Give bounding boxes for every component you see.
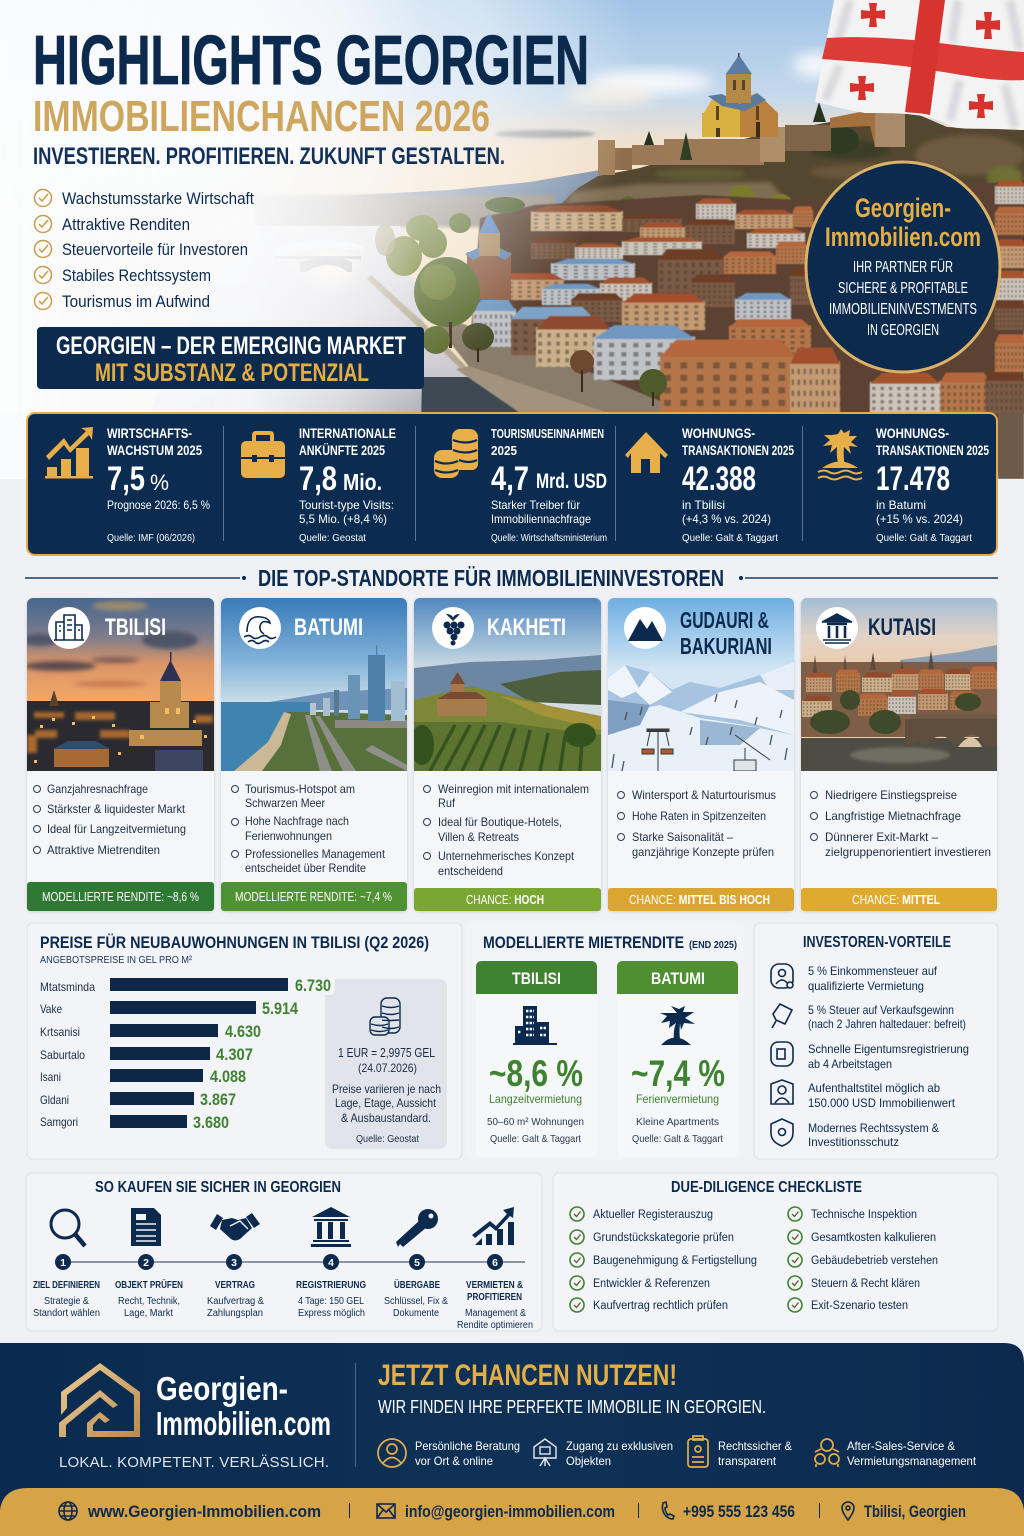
stat: transactions Batumi (818, 425, 989, 544)
service: legally secure: Rechtssicher & (718, 1439, 792, 1453)
panel: key figures (27, 413, 997, 555)
bar chart: Saburtalo (40, 1048, 85, 1062)
step labels: VERTRAG (215, 1280, 255, 1291)
stat: international arrivals: Tourist-type Visits: (299, 498, 394, 512)
note box: exchange rate: Quelle: Geostat (356, 1134, 419, 1145)
panel: investor benefits: INVESTOREN-VORTEILE (803, 934, 951, 951)
timeline: 1 (60, 1257, 66, 1269)
step labels: Kaufvertrag & (207, 1296, 264, 1307)
church (702, 53, 778, 137)
step labels: Strategie & (44, 1296, 89, 1307)
bar chart: 6.730 (295, 976, 331, 995)
panel: due-diligence checklist: Kaufvertrag rechtlich prüfen (593, 1300, 728, 1312)
rating: Tbilisi yield: MODELLIERTE RENDITE: ~8,6 % (42, 890, 199, 904)
section heading: top locations (25, 565, 998, 591)
panel: modelled rental yield: MODELLIERTE MIETRENDITE (483, 933, 684, 952)
stat: economic growth: Prognose 2026: 6,5 % (107, 498, 210, 512)
yield card: Batumi: ~7,4 % (631, 1053, 725, 1094)
bar chart: 4.088 (210, 1067, 246, 1086)
card: Gudauri and Bakuriani: GUDAURI & (680, 607, 769, 633)
rating: Gudauri chance (608, 888, 794, 911)
panel: modelled rental yield (465, 923, 745, 1159)
card: Tbilisi: Ganzjahresnachfrage (47, 782, 148, 796)
bar chart: 4.630 (225, 1022, 261, 1041)
icon: mountains (624, 607, 666, 649)
stat: economic growth: 7,5 (107, 460, 145, 498)
icon: location pin (842, 1502, 854, 1520)
step labels: ÜBERGABE (394, 1278, 440, 1291)
panel: investor benefits: 150.000 USD Immobilienwert (808, 1096, 956, 1110)
hero checklist (34, 190, 254, 311)
icon: wave (239, 607, 281, 649)
hero checklist: Attraktive Renditen (62, 216, 190, 234)
bar chart: Vake (40, 1002, 62, 1016)
stat: international arrivals: Quelle: Geostat (299, 532, 366, 544)
card: Tbilisi: TBILISI (105, 614, 166, 641)
title: HIGHLIGHTS GEORGIEN (33, 21, 589, 99)
card: Kutaisi: KUTAISI (868, 614, 936, 641)
stat: tourism revenue: Immobiliennachfrage (491, 512, 591, 526)
badge: Georgien-Immobilien.com: Georgien- (855, 193, 951, 223)
card: Kakheti: Unternehmerisches Konzept (438, 849, 575, 863)
card: Batumi (221, 598, 407, 911)
stat: transactions Tbilisi: Quelle: Galt & Taggart (682, 532, 778, 544)
stat: transactions Tbilisi: (+4,3 % vs. 2024) (682, 512, 771, 526)
service: after-sales: Vermietungsmanagement (847, 1454, 977, 1468)
yield card: Tbilisi: Langzeitvermietung (489, 1092, 582, 1106)
note box: exchange rate: (24.07.2026) (358, 1061, 417, 1075)
card: Gudauri and Bakuriani: ganzjährige Konzepte prüfen (632, 845, 774, 859)
icon: handshake (210, 1213, 260, 1240)
panel: investor benefits: 5 % Steuer auf Verkaufsgewinn (808, 1003, 954, 1017)
step labels: REGISTRIERUNG (296, 1280, 366, 1291)
icon: capital gains (772, 1004, 792, 1028)
logo (59, 1363, 331, 1471)
rating: Kakheti chance (414, 888, 601, 911)
contact bar: +995 555 123 456 (683, 1502, 795, 1521)
panel: due-diligence checklist: Technische Inspektion (811, 1209, 917, 1221)
note box: exchange rate (318, 975, 447, 1149)
logo: Georgien- (156, 1370, 288, 1407)
step labels: Schlüssel, Fix & (384, 1296, 448, 1307)
note box: exchange rate: Lage, Etage, Aussicht (335, 1096, 437, 1110)
rating: Tbilisi yield (27, 882, 214, 911)
bar chart: Samgori (40, 1115, 78, 1129)
step labels: Management & (465, 1308, 526, 1319)
rating: Batumi yield: MODELLIERTE RENDITE: ~7,4 % (235, 890, 392, 904)
panel: investor benefits: 5 % Einkommensteuer auf (808, 964, 938, 978)
panel: investor benefits: qualifizierte Vermietung (808, 979, 924, 993)
card: Kakheti: Villen & Retreats (438, 830, 519, 844)
hero checklist: Stabiles Rechtssystem (62, 267, 211, 285)
card: Gudauri and Bakuriani: BAKURIANI (680, 633, 772, 659)
panel: new-build prices in Tbilisi (27, 923, 462, 1159)
service: after-sales (815, 1439, 977, 1468)
stat: economic growth (45, 425, 210, 544)
bar chart: Gldani (40, 1093, 69, 1107)
hero photo: Tbilisi skyline (0, 0, 1024, 479)
card: Batumi: entscheidet über Rendite (245, 861, 366, 875)
card: Kakheti: Weinregion mit internationalem (438, 782, 589, 796)
icon: registry building (311, 1207, 351, 1247)
panel: investor benefits (754, 923, 998, 1159)
stat: tourism revenue: Starker Treiber für (491, 498, 580, 512)
yield card: Tbilisi: Quelle: Galt & Taggart (490, 1133, 581, 1145)
step labels: VERMIETEN & (466, 1280, 523, 1291)
card: Kutaisi: Dünnerer Exit-Markt – (825, 830, 938, 844)
service: exclusive objects (534, 1439, 673, 1468)
rating: Gudauri chance: CHANCE: MITTEL BIS HOCH (629, 893, 770, 907)
icon: tax person (771, 964, 793, 988)
bar chart: 3.867 (200, 1090, 236, 1109)
bar chart: 3.680 (193, 1113, 229, 1132)
check icons (570, 1207, 802, 1312)
stat: tourism revenue: 4,7 (491, 460, 529, 498)
step labels (33, 1278, 533, 1331)
icon: registry (771, 1042, 793, 1066)
card: Batumi: BATUMI (294, 614, 363, 641)
card: Tbilisi (22, 598, 214, 911)
hero checklist: Wachstumsstarke Wirtschaft (62, 190, 254, 208)
step labels: Rendite optimieren (457, 1320, 533, 1331)
note box: exchange rate: & Ausbaustandard. (341, 1111, 431, 1125)
panel: new-build prices in Tbilisi: PREISE FÜR NEUBAUWOHNUNGEN IN TBILISI (Q2 2026) (40, 933, 429, 952)
icon: phone (662, 1502, 674, 1519)
panel: buying process (26, 1173, 542, 1331)
service: exclusive objects: Zugang zu exklusiven (566, 1439, 673, 1453)
contact bar: www.Georgien-Immobilien.com (87, 1502, 321, 1521)
old town buildings (367, 180, 1024, 479)
step labels: Recht, Technik, (118, 1296, 180, 1307)
service: legally secure: transparent (718, 1454, 777, 1468)
note box: exchange rate: Preise variieren je nach (332, 1082, 441, 1096)
timeline: 2 (143, 1257, 149, 1269)
stat: international arrivals: 7,8 (299, 460, 337, 498)
subtitle: IMMOBILIENCHANCEN 2026 (33, 92, 490, 141)
timeline: 4 (328, 1257, 334, 1269)
panel: due-diligence checklist: Aktueller Registerauszug (593, 1209, 713, 1221)
call to action subline: WIR FINDEN IHRE PERFEKTE IMMOBILIE IN GEORGIEN. (378, 1397, 766, 1417)
stat: transactions Tbilisi: WOHNUNGS- (682, 425, 755, 441)
photo: Kakheti vineyards (410, 598, 601, 771)
badge: Georgien-Immobilien.com: SICHERE & PROFITABLE (838, 280, 968, 297)
card: Kutaisi (801, 598, 997, 911)
stat: economic growth: WACHSTUM 2025 (107, 442, 202, 458)
hero checklist: Tourismus im Aufwind (62, 293, 210, 311)
flag of Georgia (815, 0, 1024, 130)
panel: investor benefits: Schnelle Eigentumsregistrierung (808, 1042, 969, 1056)
card: Tbilisi: Attraktive Mietrenditen (47, 843, 160, 857)
timeline (55, 1254, 525, 1270)
panel: investor benefits: Aufenthaltstitel möglich ab (808, 1081, 940, 1095)
yield card: Batumi: Kleine Apartments (636, 1116, 719, 1128)
contact bar: Tbilisi, Georgien (864, 1502, 966, 1521)
stat: transactions Batumi: WOHNUNGS- (876, 425, 949, 441)
photo: Tbilisi at dusk (22, 598, 214, 771)
panel: due-diligence checklist (553, 1173, 998, 1331)
card: Kakheti (410, 598, 601, 911)
yield card: Batumi: Quelle: Galt & Taggart (632, 1133, 723, 1145)
stat: transactions Batumi: in Batumi (876, 498, 926, 512)
section heading: top locations: DIE TOP-STANDORTE FÜR IMMOBILIENINVESTOREN (258, 565, 724, 591)
note box: exchange rate: 1 EUR = 2,9975 GEL (338, 1046, 435, 1060)
icon: magnifier (51, 1210, 85, 1246)
service: consultation: vor Ort & online (415, 1454, 493, 1468)
yield card: Tbilisi: 50–60 m² Wohnungen (487, 1116, 584, 1128)
icon: grapes (432, 607, 474, 649)
service: consultation (378, 1439, 520, 1468)
step labels: OBJEKT PRÜFEN (115, 1278, 183, 1291)
panel: due-diligence checklist: Entwickler & Referenzen (593, 1278, 710, 1290)
stat: tourism revenue: 2025 (491, 443, 517, 458)
service: legally secure (688, 1436, 792, 1468)
photo: Kutaisi old town (801, 598, 997, 771)
card: Kutaisi: Langfristige Mietnachfrage (825, 809, 961, 823)
hero checklist: Steuervorteile für Investoren (62, 241, 248, 259)
panel: investor benefits: Investitionsschutz (808, 1135, 899, 1149)
timeline: 5 (414, 1257, 420, 1269)
yield card: Tbilisi: TBILISI (512, 969, 561, 988)
rating: Kutaisi chance: CHANCE: MITTEL (852, 893, 940, 907)
service: after-sales: After-Sales-Service & (847, 1439, 955, 1453)
stat: transactions Tbilisi: in Tbilisi (682, 498, 725, 512)
bar chart: Mtatsminda (40, 980, 95, 994)
stat: tourism revenue: Quelle: Wirtschaftsministerium (491, 532, 607, 544)
card: Kakheti: KAKHETI (487, 614, 566, 641)
stat: transactions Batumi: (+15 % vs. 2024) (876, 512, 963, 526)
step labels: Zahlungsplan (207, 1308, 263, 1319)
icon: mail (377, 1504, 395, 1518)
panel: buying process: SO KAUFEN SIE SICHER IN GEORGIEN (95, 1179, 341, 1196)
banner: emerging market: MIT SUBSTANZ & POTENZIAL (95, 359, 369, 387)
badge: Georgien-Immobilien.com (806, 162, 1000, 372)
icon: document (131, 1208, 161, 1246)
icon: residence permit (771, 1080, 793, 1104)
bar chart: Isani (40, 1070, 61, 1084)
icon: growth chart (472, 1207, 514, 1245)
timeline: 3 (231, 1257, 237, 1269)
service: consultation: Persönliche Beratung (415, 1439, 520, 1453)
stat: transactions Tbilisi (625, 425, 794, 544)
stat: international arrivals: Mio. (343, 469, 382, 495)
rating: Batumi yield (221, 882, 407, 911)
footer (0, 1343, 1024, 1536)
icon: palm (660, 1006, 695, 1045)
hillside (530, 108, 1024, 270)
timeline: 6 (492, 1257, 498, 1269)
yield card: Tbilisi (476, 961, 597, 1157)
stat: transactions Batumi: Quelle: Galt & Taggart (876, 532, 972, 544)
step labels: Express möglich (298, 1308, 365, 1319)
panel: investor benefits: Modernes Rechtssystem & (808, 1121, 939, 1135)
stat: tourism revenue: TOURISMUSEINNAHMEN (491, 426, 604, 441)
fortress walls (598, 102, 905, 175)
stat: international arrivals: INTERNATIONALE (299, 425, 396, 441)
icon: columns (816, 607, 858, 649)
card: Kutaisi: Niedrigere Einstiegspreise (825, 788, 957, 802)
panel: due-diligence checklist: DUE-DILIGENCE CHECKLISTE (671, 1179, 862, 1196)
rating: Kakheti chance: CHANCE: HOCH (466, 893, 544, 907)
stat: tourism revenue: Mrd. USD (536, 470, 607, 493)
panel: due-diligence checklist: Gesamtkosten kalkulieren (811, 1232, 936, 1244)
yield card: Batumi: Ferienvermietung (636, 1092, 719, 1106)
panel: modelled rental yield: (END 2025) (689, 940, 737, 951)
logo: LOKAL. KOMPETENT. VERLÄSSLICH. (59, 1454, 329, 1471)
photo: Batumi coast (221, 598, 407, 771)
stat: international arrivals: ANKÜNFTE 2025 (299, 442, 385, 458)
stat: transactions Tbilisi: 42.388 (682, 460, 756, 498)
card: Kakheti: entscheidend (438, 864, 503, 878)
card: Batumi: Professionelles Management (245, 847, 386, 861)
step labels: PROFITIEREN (467, 1292, 522, 1303)
panel: new-build prices in Tbilisi: ANGEBOTSPREISE IN GEL PRO M² (40, 954, 192, 966)
step labels: ZIEL DEFINIEREN (33, 1280, 100, 1291)
logo: Immobilien.com (156, 1405, 331, 1442)
card: Tbilisi: Stärkster & liquidester Markt (47, 802, 186, 816)
badge: Georgien-Immobilien.com: IHR PARTNER FÜR (853, 258, 953, 276)
banner: emerging market: GEORGIEN – DER EMERGING MARKET (56, 332, 406, 360)
panel: due-diligence checklist: Exit-Szenario testen (811, 1300, 908, 1312)
stat: transactions Tbilisi: TRANSAKTIONEN 2025 (682, 442, 794, 458)
stat: transactions Batumi: 17.478 (876, 460, 950, 498)
card: Kakheti: Ideal für Boutique-Hotels, (438, 815, 562, 829)
card: Batumi: Hohe Nachfrage nach (245, 814, 349, 828)
panel: investor benefits: ab 4 Arbeitstagen (808, 1057, 892, 1071)
stat: economic growth: % (150, 470, 169, 495)
stat: international arrivals: 5,5 Mio. (+8,4 %) (299, 512, 387, 526)
panel: due-diligence checklist: Baugenehmigung & Fertigstellung (593, 1255, 757, 1267)
card: Kutaisi: zielgruppenorientiert investieren (825, 845, 991, 859)
icon: high-rise (513, 1006, 557, 1045)
bar chart (40, 976, 331, 1132)
card: Kakheti: Ruf (438, 796, 456, 810)
tagline: INVESTIEREN. PROFITIEREN. ZUKUNFT GESTALTEN. (33, 143, 505, 170)
banner: emerging market (37, 327, 424, 389)
card: Gudauri and Bakuriani: Starke Saisonalität – (632, 830, 733, 844)
step labels: Lage, Markt (124, 1308, 173, 1319)
yield card: Batumi: BATUMI (651, 969, 705, 988)
contact bar: info@georgien-immobilien.com (405, 1502, 615, 1521)
card: Gudauri and Bakuriani (608, 598, 794, 911)
trees (375, 197, 667, 406)
small blue-domed church (465, 212, 512, 300)
step labels: Dokumente (393, 1308, 439, 1319)
panel: investor benefits: (nach 2 Jahren haltedauer: befreit) (808, 1017, 966, 1031)
panel: due-diligence checklist: Gebäudebetrieb verstehen (811, 1255, 938, 1267)
card: Batumi: Tourismus-Hotspot am (245, 782, 355, 796)
step labels: Standort wählen (33, 1308, 100, 1319)
icon: key (396, 1209, 438, 1247)
card: Gudauri and Bakuriani: Hohe Raten in Spitzenzeiten (632, 809, 766, 823)
rating: Kutaisi chance (801, 888, 997, 911)
stat: tourism revenue (434, 426, 607, 544)
badge: Georgien-Immobilien.com: IN GEORGIEN (867, 322, 939, 339)
icon: shield (771, 1119, 793, 1146)
service: exclusive objects: Objekten (566, 1454, 611, 1468)
card: Tbilisi: Ideal für Langzeitvermietung (47, 822, 186, 836)
bridge (294, 256, 361, 272)
icon: globe (59, 1502, 77, 1520)
stat: economic growth: WIRTSCHAFTS- (107, 425, 192, 441)
step labels: 4 Tage: 150 GEL (298, 1296, 364, 1307)
contact bar (0, 1488, 1024, 1536)
card: Batumi: Schwarzen Meer (245, 796, 325, 810)
stat: international arrivals (241, 425, 396, 544)
panel: due-diligence checklist: Grundstückskategorie prüfen (593, 1232, 734, 1244)
icon: city (48, 607, 90, 649)
bar chart: 4.307 (216, 1045, 253, 1064)
stat: economic growth: Quelle: IMF (06/2026) (107, 532, 195, 544)
bar chart: Krtsanisi (40, 1025, 80, 1039)
yield card: Batumi (617, 961, 738, 1157)
card: Gudauri and Bakuriani: Wintersport & Naturtourismus (632, 788, 776, 802)
card: Batumi: Ferienwohnungen (245, 829, 332, 843)
photo: ski slopes (608, 598, 794, 771)
yield card: Tbilisi: ~8,6 % (489, 1053, 583, 1094)
bar chart: 5.914 (262, 999, 298, 1018)
call to action: JETZT CHANCEN NUTZEN! (378, 1359, 677, 1392)
panel: due-diligence checklist: Steuern & Recht klären (811, 1278, 920, 1290)
